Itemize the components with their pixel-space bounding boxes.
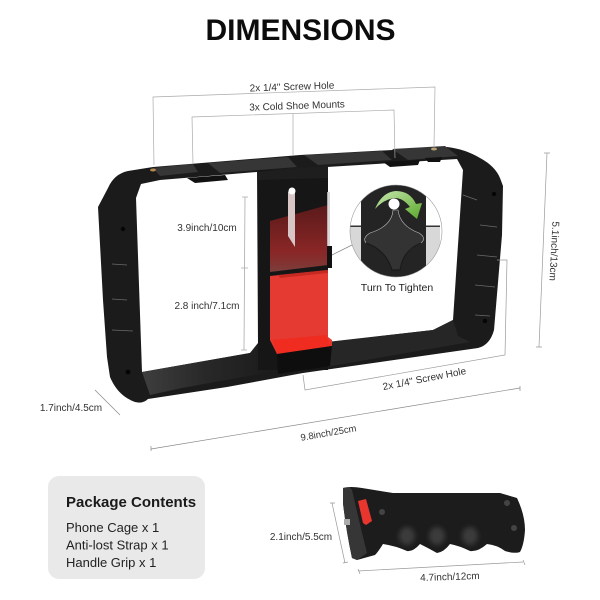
phone cage frame [98, 146, 503, 403]
tray floor of cage [142, 345, 270, 395]
package list: Anti-lost Strap x 1 [66, 538, 169, 552]
dimension: phone clamp range: 2.8 inch/7.1cm [174, 301, 240, 312]
phone clamp [258, 166, 332, 374]
dimension: grip length [358, 560, 525, 584]
dimension: grip length: 4.7inch/12cm [420, 571, 480, 584]
panel: package contents [48, 476, 205, 579]
package list: Handle Grip x 1 [66, 555, 156, 570]
dimension: phone clamp range [174, 197, 248, 350]
dimension: bottom screw holes [303, 260, 507, 393]
grip screws [379, 500, 517, 531]
dimension: cold shoe mounts [192, 99, 395, 164]
knob [365, 210, 424, 270]
dimension: height: 5.1inch/13cm [546, 221, 561, 281]
package list [66, 520, 169, 570]
mount undersides [187, 157, 442, 183]
red button [358, 499, 372, 525]
dimension: bottom screw holes: 2x 1/4" Screw Hole [382, 366, 468, 393]
dimension: phone clamp range: 3.9inch/10cm [177, 223, 237, 234]
screw holes on top [150, 168, 156, 172]
handle grip [343, 487, 525, 560]
right tray floor [320, 320, 470, 368]
dimension: top screw holes: 2x 1/4" Screw Hole [250, 81, 335, 94]
label: turn to tighten: Turn To Tighten [361, 282, 433, 294]
dimension: depth [40, 390, 120, 415]
dimension: depth: 1.7inch/4.5cm [40, 403, 102, 414]
grip ridges [112, 195, 497, 331]
magnifier: turn to tighten [332, 180, 442, 280]
finger shading [399, 527, 478, 545]
dimension: top screw holes [153, 81, 435, 165]
package list: Phone Cage x 1 [66, 520, 159, 535]
dimension: width: 9.8inch/25cm [300, 423, 357, 444]
tripod stud [344, 519, 350, 525]
package heading: Package Contents [66, 494, 196, 511]
cold shoe mounts [153, 146, 458, 176]
clamp base [277, 346, 332, 374]
dimension: grip diameter [270, 503, 348, 563]
rotate arrow [375, 191, 422, 219]
dimension: cold shoe mounts: 3x Cold Shoe Mounts [249, 99, 345, 114]
dimension: grip diameter: 2.1inch/5.5cm [270, 532, 332, 543]
grip end cap [343, 487, 367, 560]
dimension: height [536, 153, 561, 347]
translucent extended clamp [270, 205, 328, 272]
side screws [121, 192, 496, 374]
red clamp body [270, 270, 332, 354]
dimension: width [151, 386, 520, 451]
title: DIMENSIONS [205, 14, 396, 47]
